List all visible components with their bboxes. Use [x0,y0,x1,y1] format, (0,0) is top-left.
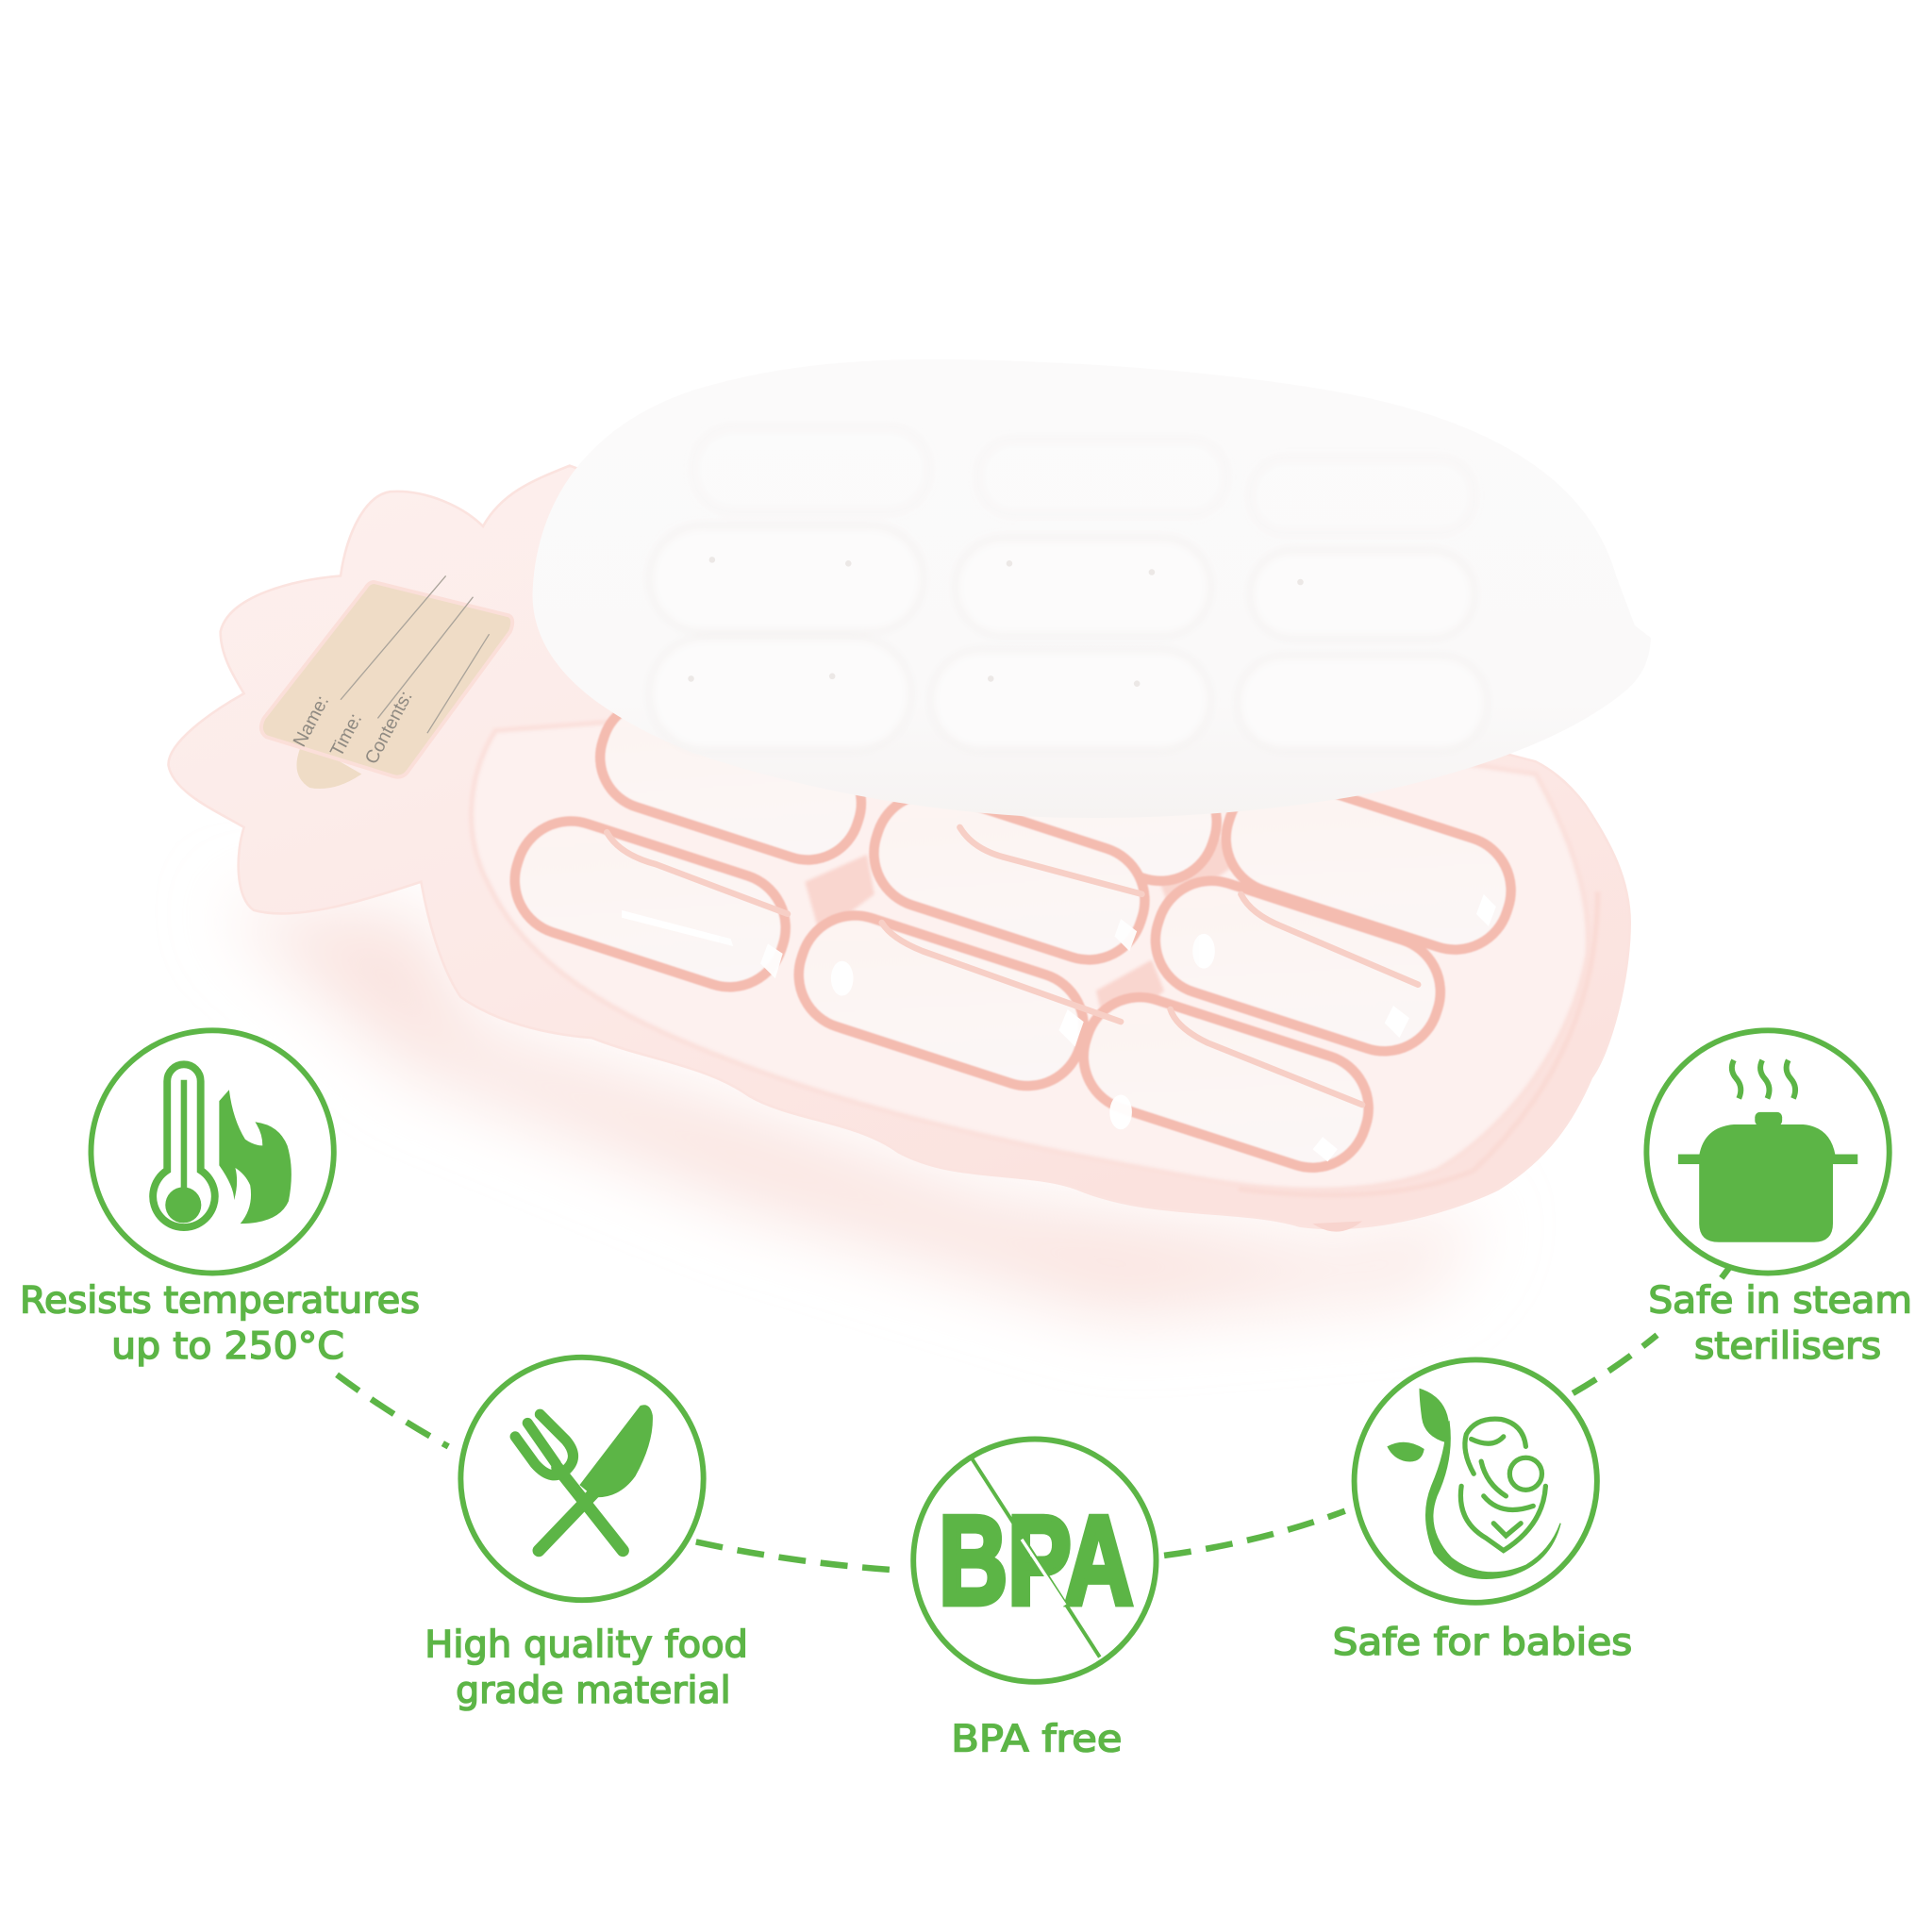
product: pineapple tray base [169,466,1630,1232]
tray body and crown [169,466,1630,1228]
feature: steam sterilisers [1646,1030,1912,1368]
caption: food grade: grade material [456,1669,731,1712]
label sticker: Time: [326,710,366,760]
label sticker: Contents: [361,688,417,768]
icon: thermometer [153,1064,215,1227]
label sticker: Name: [290,692,333,750]
caption: steam: sterilisers [1694,1324,1881,1368]
well inner walls [607,827,1418,1105]
feature: temperature [20,1030,420,1368]
well highlights [622,894,1496,1161]
label sticker [261,575,512,789]
icon circle: BPA [913,1439,1157,1682]
icon: BPA crossed out: BPA [939,1491,1133,1631]
caption: temperature: Resists temperatures [20,1279,420,1323]
caption: temperature: up to 250°C [111,1324,344,1368]
icon: BPA crossed out [939,1456,1133,1657]
icon circle: temperature [91,1030,334,1274]
feature: food grade [425,1357,748,1712]
inner basin [472,693,1588,1190]
icon circle: steam [1646,1030,1890,1274]
caption: steam: Safe in steam [1648,1279,1912,1323]
caption: food grade [425,1624,748,1712]
product: white lid [533,359,1651,818]
product shadow [223,904,1486,1313]
icon circle: food grade [460,1357,704,1600]
lid moulded wells [650,427,1486,749]
tray rim highlight [1239,891,1598,1195]
dashed connector path [337,1268,1729,1571]
feature: BPA free [913,1439,1157,1760]
icon: flame [219,1090,291,1224]
food wells [501,687,1525,1182]
icon: mother and baby with leaves [1387,1389,1560,1578]
icon circle: babies [1355,1359,1597,1603]
caption: BPA free: BPA free [951,1717,1122,1760]
caption: temperature [20,1279,420,1368]
caption: babies: Safe for babies [1333,1621,1632,1664]
feature: safe for babies [1333,1359,1632,1664]
caption: steam [1648,1279,1912,1368]
icon: steaming pot [1678,1060,1857,1242]
caption: food grade: High quality food [425,1624,748,1667]
food well junction connectors [805,836,1232,1041]
tray foot [1313,1221,1362,1232]
icon: fork and knife [515,1405,653,1551]
lid dimples [688,557,1304,687]
